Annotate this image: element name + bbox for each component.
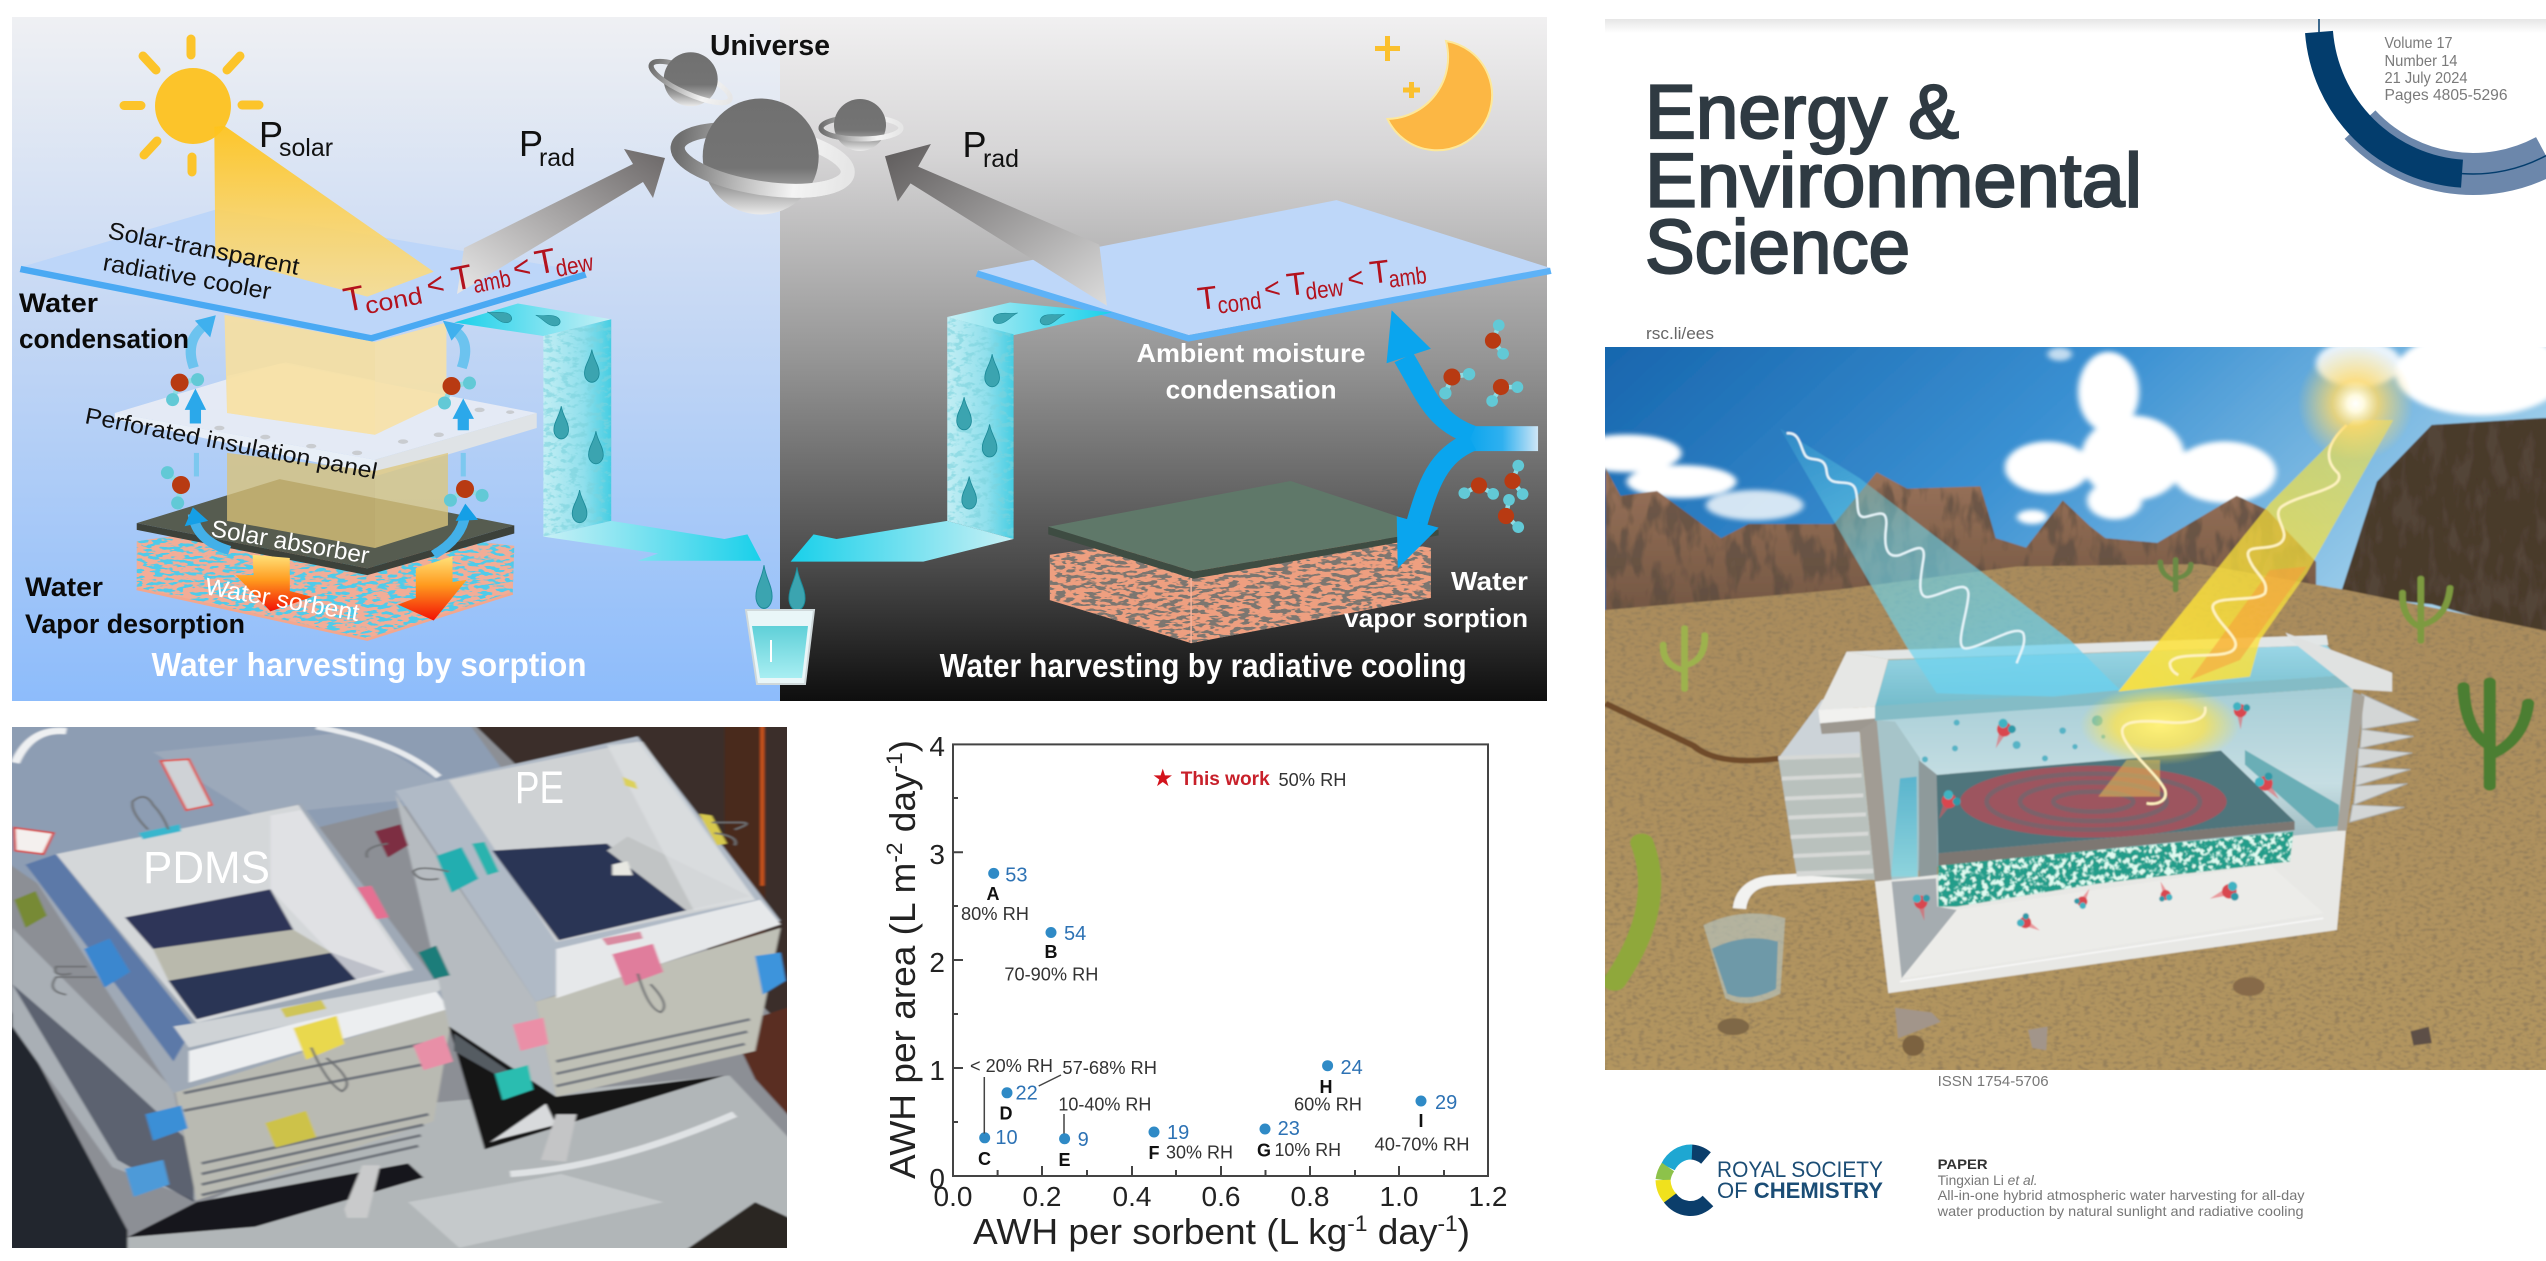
label: P rad left: P — [519, 123, 543, 164]
label: temperature relation T cond < T amb < T dew — [340, 234, 596, 324]
axis tick labels: 1 — [929, 1055, 945, 1086]
label: solar-transparent radiative cooler: radiative cooler — [101, 249, 273, 305]
label: P rad left — [519, 123, 575, 172]
reference numbers: 10 — [995, 1127, 1018, 1149]
paper citation: water production by natural sunlight and radiative cooling — [1937, 1203, 2304, 1219]
relative humidity labels: 80% RH — [961, 904, 1029, 924]
label: temperature relation T cond < T amb < T dew: < — [510, 250, 533, 286]
left panel — [1891, 777, 1917, 877]
heading: water condensation: Water — [19, 288, 99, 318]
left device body — [12, 928, 196, 1200]
axis tick labels: 0.4 — [1113, 1181, 1151, 1212]
clouds — [1572, 331, 2546, 524]
label: water vapor sorption: vapor sorption — [1344, 603, 1528, 633]
blue radiation and yellow sunlight beams — [1780, 420, 2393, 804]
water channel night — [947, 303, 1112, 335]
water harvesting device cutaway — [1778, 635, 2353, 993]
axis tick labels: 0.0 — [934, 1181, 972, 1212]
label: temperature relation T cond < T dew < T amb: amb — [1387, 262, 1428, 294]
solar absorber plate — [137, 479, 514, 568]
panel title: water harvesting by radiative cooling: Water harvesting by radiative cooling — [940, 647, 1467, 684]
this work marker: This work — [1181, 769, 1270, 790]
y axis title: ) — [882, 740, 923, 752]
axis tick labels — [929, 731, 1507, 1212]
issue details: Number 14 — [2384, 53, 2458, 70]
reference numbers: 54 — [1064, 923, 1086, 945]
label: temperature relation T cond < T dew < T amb — [1195, 248, 1429, 322]
axis tick labels: 2 — [929, 947, 945, 978]
rocks — [1717, 977, 2432, 1056]
axis tick labels: 1.0 — [1380, 1181, 1418, 1212]
right fins — [2349, 694, 2418, 822]
issue details: Pages 4805-5296 — [2384, 87, 2508, 104]
label: PDMS: PDMS — [143, 842, 270, 893]
mountains — [1605, 467, 2316, 633]
water channel — [454, 303, 611, 336]
sorbent block — [137, 521, 514, 639]
axis tick labels: 0.2 — [1023, 1181, 1061, 1212]
relative humidity labels: 30% RH — [1166, 1142, 1233, 1162]
label: universe: Universe — [710, 30, 830, 62]
cooler plate — [20, 209, 586, 336]
absorber plate — [1937, 751, 2295, 853]
yellow column — [224, 315, 375, 435]
top shadow strip — [1605, 19, 2546, 33]
label: PE: PE — [515, 762, 564, 813]
label: P rad right — [962, 124, 1019, 173]
sorbent layer — [1938, 832, 2293, 907]
relative humidity labels: < 20% RH — [970, 1056, 1053, 1076]
heading: water vapor desorption: Water — [25, 572, 104, 602]
heading: water vapor desorption: Vapor desorption — [25, 609, 245, 639]
label: temperature relation T cond < T dew < T amb: T — [1284, 265, 1308, 303]
reference numbers: 53 — [1005, 864, 1028, 886]
photo: PDMS and PE test devices on rooftop — [0, 710, 816, 1261]
panel title: water harvesting by sorption: Water harvesting by sorption — [152, 646, 586, 683]
label: temperature relation T cond < T amb < T dew: amb — [471, 265, 513, 299]
y axis title: day — [882, 772, 923, 843]
axis tick labels: 4 — [929, 731, 945, 762]
label: P solar: solar — [279, 134, 333, 162]
journal cover: Energy & Environmental Science — [1572, 19, 2546, 1219]
icon: planets (universe) — [647, 52, 901, 214]
branch — [1605, 703, 1785, 761]
sample letters: I — [1418, 1111, 1424, 1131]
journal title: Environmental — [1645, 139, 2142, 224]
label: temperature relation T cond < T amb < T dew: T — [532, 241, 559, 283]
left interior glass — [1875, 720, 1920, 880]
issue details: Volume 17 — [2384, 35, 2453, 52]
sample letters — [978, 884, 1424, 1170]
legs — [344, 1165, 380, 1218]
x axis title: day — [1367, 1211, 1437, 1252]
journal url: rsc.li/ees — [1646, 324, 1714, 343]
cover artwork: desert scene with water harvesting device — [1605, 347, 2546, 1070]
icon: sun with rays — [124, 39, 259, 172]
label: temperature relation T cond < T dew < T amb: T — [1368, 253, 1391, 291]
solar beam through cooler — [214, 126, 434, 297]
label: temperature relation T cond < T dew < T amb: cond — [1216, 287, 1263, 320]
label: ambient moisture condensation: condensation — [1166, 375, 1337, 405]
journal title — [1645, 70, 2142, 290]
axis tick labels: 0.6 — [1202, 1181, 1240, 1212]
label: temperature relation T cond < T dew < T amb: dew — [1304, 274, 1346, 306]
desert ground — [1590, 564, 2546, 1095]
outlet pipe and glass — [1739, 874, 1874, 909]
heading: water condensation: condensation — [19, 324, 189, 354]
label: ambient moisture condensation — [1136, 338, 1366, 405]
icon: water molecules night — [1439, 317, 1542, 535]
x axis title: -1 — [1347, 1211, 1367, 1236]
relative humidity labels — [961, 904, 1470, 1162]
paper citation: Tingxian Li et al. — [1938, 1172, 2038, 1188]
cooler plate night — [977, 200, 1551, 335]
lower chamber — [1875, 830, 2346, 993]
sample letters: D — [1000, 1104, 1012, 1124]
background cacti — [1614, 559, 2528, 982]
heading: water vapor desorption — [25, 572, 245, 639]
interior bubbles — [1922, 715, 2105, 762]
clip wires — [53, 797, 746, 1091]
vapor flow arrows — [191, 324, 207, 368]
icon: water molecules — [151, 373, 491, 522]
label: temperature relation T cond < T amb < T dew: cond — [363, 282, 425, 320]
label: temperature relation T cond < T dew < T amb: T — [1195, 279, 1219, 317]
paper citation: All-in-one hybrid atmospheric water harvesting for all-day — [1938, 1187, 2305, 1203]
y axis title: AWH per area (L m — [882, 872, 923, 1179]
reference numbers: 22 — [1016, 1082, 1038, 1104]
axis tick labels: 3 — [929, 839, 945, 870]
icon: glass of water with drops — [746, 565, 814, 684]
grey wall — [1820, 718, 1875, 734]
sorbent sponge night — [1050, 521, 1431, 643]
paper citation: PAPER — [1938, 1156, 1988, 1172]
reference numbers — [995, 864, 1457, 1151]
axis tick labels: 0 — [929, 1163, 945, 1194]
reference numbers: 29 — [1435, 1092, 1457, 1114]
sample letters: G — [1257, 1140, 1271, 1160]
arrow: radiation to universe (night) — [885, 144, 1107, 306]
label: P rad right: P — [962, 124, 987, 165]
leader lines — [984, 1075, 1064, 1134]
label: ambient moisture condensation: Ambient moisture — [1136, 338, 1366, 368]
label: water sorbent: Water sorbent — [203, 573, 362, 627]
label: temperature relation T cond < T dew < T amb: < — [1345, 262, 1365, 295]
reference numbers: 19 — [1167, 1122, 1189, 1144]
heading: water condensation — [19, 288, 189, 354]
left fins — [1778, 700, 1875, 880]
reference numbers: 24 — [1340, 1057, 1363, 1079]
label: P solar — [259, 114, 333, 162]
panel: water harvesting by sorption (daytime schematic) — [12, 17, 781, 701]
label: solar-transparent radiative cooler: Solar-transparent — [106, 217, 302, 281]
relative humidity labels: 70-90% RH — [1004, 965, 1098, 985]
y axis title: -2 — [882, 843, 907, 863]
interior back wall — [1875, 687, 2353, 880]
sample letters: B — [1044, 942, 1058, 962]
arrow: radiation to universe (day) — [457, 149, 665, 294]
relative humidity labels: 10% RH — [1274, 1140, 1341, 1160]
label: P solar: P — [259, 114, 283, 155]
label: water vapor sorption: Water — [1451, 566, 1528, 596]
sample letters: F — [1148, 1143, 1160, 1163]
label: temperature relation T cond < T amb < T dew: T — [340, 279, 368, 320]
x axis title: -1 — [1437, 1211, 1458, 1236]
glass slab and top frame — [1875, 675, 2353, 721]
issn: ISSN 1754-5706 — [1938, 1073, 2049, 1090]
right frame — [2285, 633, 2392, 831]
label: temperature relation T cond < T amb < T dew: T — [448, 258, 476, 299]
sample letters: H — [1320, 1077, 1332, 1097]
journal title: Energy & — [1645, 70, 1959, 155]
label: P rad left: rad — [539, 144, 575, 172]
sample letters: C — [978, 1149, 991, 1169]
logo: Royal Society of Chemistry: ROYAL SOCIETY — [1717, 1157, 1883, 1182]
right panel — [2245, 750, 2339, 828]
label: P rad right: rad — [983, 145, 1019, 173]
sun — [2298, 346, 2414, 462]
icon: moon and stars — [1375, 36, 1492, 150]
reference numbers: 9 — [1078, 1129, 1089, 1151]
axis tick labels: 0.8 — [1291, 1181, 1329, 1212]
plot frame and ticks — [953, 744, 1488, 1176]
y axis title: -1 — [882, 752, 907, 772]
absorber plate night — [1048, 481, 1439, 572]
label: solar absorber: Solar absorber — [209, 515, 371, 570]
perforated insulation panel — [115, 363, 537, 460]
x axis title: AWH per sorbent (L kg — [973, 1211, 1336, 1252]
issue details — [2384, 35, 2508, 104]
relative humidity labels: 40-70% RH — [1374, 1134, 1470, 1154]
chart: AWH per area vs AWH per sorbent scatter plot — [882, 731, 1507, 1252]
vapor molecules — [1912, 700, 2288, 934]
data points — [979, 868, 1426, 1144]
label: perforated insulation panel: Perforated insulation panel — [83, 402, 380, 484]
binder clips — [14, 777, 786, 1197]
sticker — [14, 828, 54, 854]
label: temperature relation T cond < T amb < T dew: < — [423, 267, 447, 303]
journal title: Science — [1645, 205, 1910, 290]
relative humidity labels: 10-40% RH — [1058, 1095, 1151, 1115]
label: solar-transparent radiative cooler — [101, 217, 302, 305]
x axis title: ) — [1458, 1211, 1470, 1252]
sample letters: A — [986, 884, 1000, 904]
this work marker — [1152, 765, 1346, 792]
logo: Royal Society of Chemistry — [1663, 1152, 1883, 1208]
label: temperature relation T cond < T amb < T dew: dew — [553, 249, 596, 283]
this work marker: 50% RH — [1278, 770, 1346, 790]
heat arrows — [236, 555, 312, 611]
paper citation — [1937, 1156, 2305, 1219]
label: water vapor sorption — [1344, 566, 1528, 633]
reference numbers: 23 — [1278, 1118, 1300, 1140]
relative humidity labels: 57-68% RH — [1062, 1058, 1157, 1078]
panel: water harvesting by radiative cooling (night schematic) — [780, 17, 1551, 701]
relative humidity labels: 60% RH — [1294, 1095, 1362, 1115]
wavy light paths — [1787, 433, 2024, 663]
issue details: 21 July 2024 — [2384, 70, 2468, 87]
axis tick labels: 1.2 — [1469, 1181, 1507, 1212]
logo: Royal Society of Chemistry: OF CHEMISTRY — [1717, 1178, 1883, 1203]
this work marker: ★ — [1152, 765, 1174, 792]
right device body — [395, 794, 556, 1097]
label: temperature relation T cond < T dew < T amb: < — [1262, 272, 1282, 305]
split vapor arrows — [1467, 426, 1538, 451]
sample letters: E — [1058, 1150, 1071, 1170]
cover masthead arcs — [2319, 19, 2546, 174]
